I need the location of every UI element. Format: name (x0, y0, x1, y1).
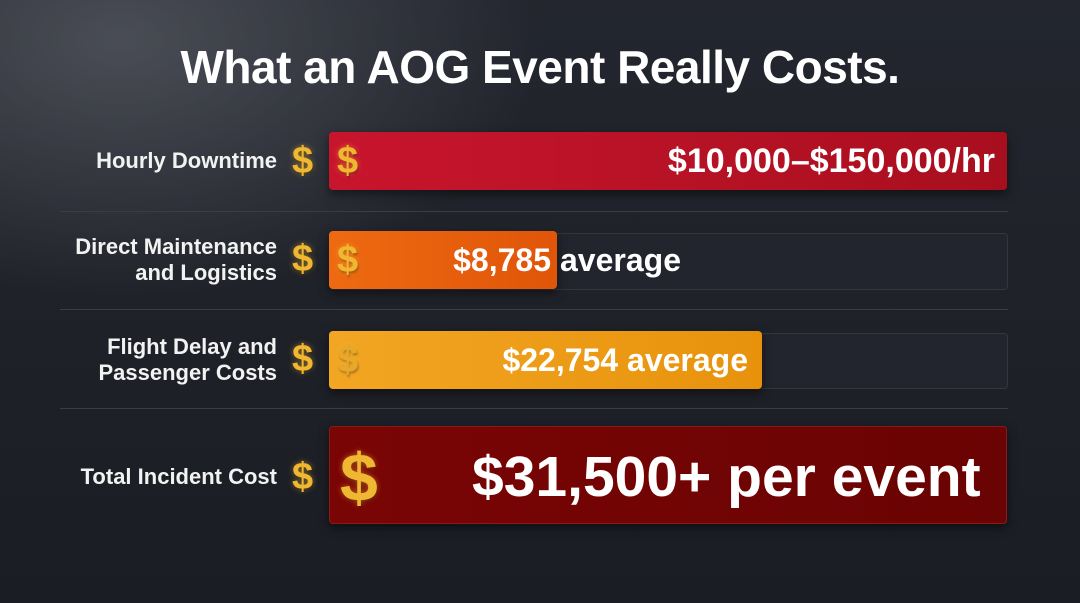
value: $10,000–$150,000/hr (668, 142, 995, 180)
row: total (80, 426, 1008, 529)
value: $31,500+ per event (472, 445, 981, 509)
row: direct maintenance (75, 231, 1008, 294)
icon: $ (292, 338, 313, 380)
bar: total (329, 426, 1007, 524)
title: What an AOG Event Really Costs. (181, 41, 899, 93)
bar: hourly (329, 132, 1007, 190)
bar: delay (329, 331, 762, 389)
row: hourly downtime (96, 132, 1009, 196)
label: hourly downtime: Hourly Downtime (96, 148, 277, 173)
icon: dollar: $ (292, 140, 313, 182)
value: $8,785 (453, 242, 551, 278)
icon: big dollar: $ (340, 440, 378, 516)
row: flight delay (98, 331, 1008, 394)
label (75, 234, 277, 285)
label (98, 334, 277, 385)
label: Passenger Costs (98, 360, 277, 385)
icon: dollar in bar: $ (337, 140, 358, 182)
label: Total Incident Cost (81, 464, 277, 489)
label: and Logistics (135, 260, 277, 285)
value suffix: average (560, 242, 681, 278)
label: Direct Maintenance (75, 234, 277, 259)
value: $22,754 average (502, 342, 748, 378)
label: Flight Delay and (107, 334, 277, 359)
icon: dollar: $ (292, 238, 313, 280)
icon: $ (337, 239, 358, 281)
bar: maintenance (329, 231, 557, 289)
icon: $ (337, 339, 358, 381)
icon: $ (292, 456, 313, 498)
